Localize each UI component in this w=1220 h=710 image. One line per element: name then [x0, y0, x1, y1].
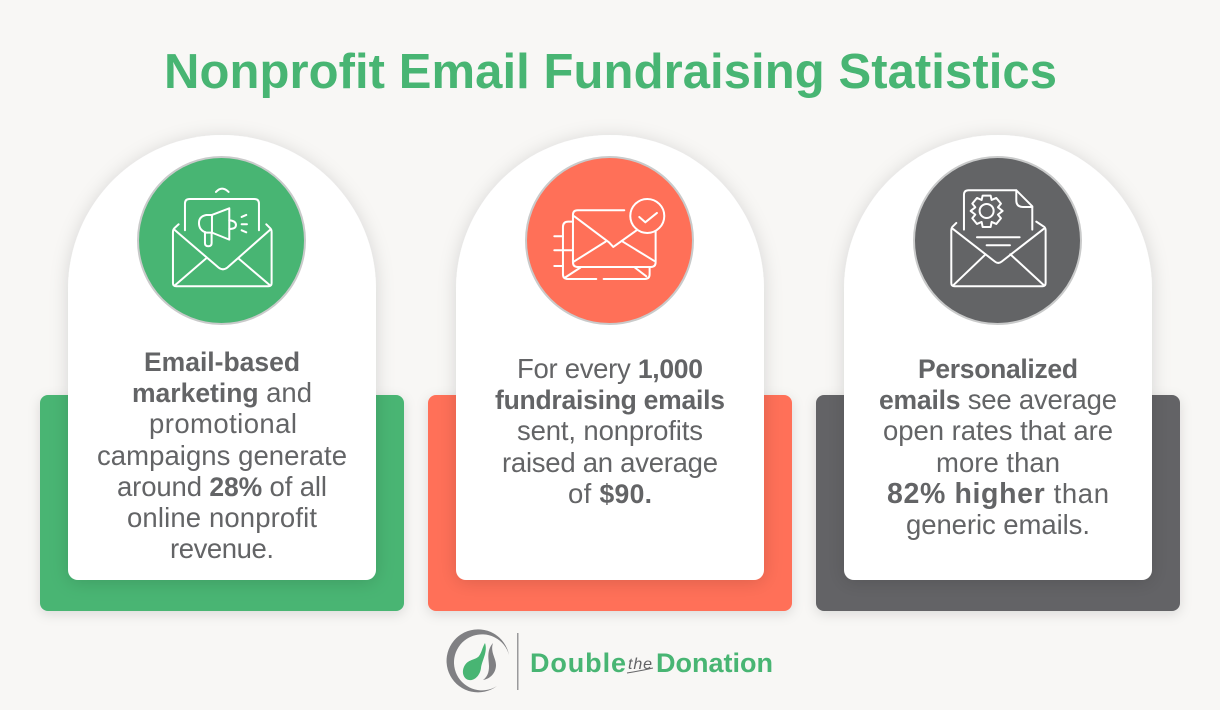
white arched card: [456, 135, 764, 580]
green base panel: [40, 395, 404, 611]
text: stat 1: Email-based: [144, 347, 300, 377]
text: stat 2: For every 1,000: [517, 353, 703, 384]
icon: envelope with gear document: [914, 157, 1081, 324]
text: stat 2: fundraising emails: [495, 385, 725, 415]
panel: funds per 1,000 emails: [428, 135, 792, 611]
text: stat 3: more than: [936, 447, 1060, 478]
title: Nonprofit Email Fundraising Statistics: [164, 45, 1057, 99]
text: stat 1: [97, 347, 347, 564]
logo wordmark: [530, 648, 773, 678]
text: stat 3: generic emails.: [906, 509, 1090, 540]
text: stat 3: [879, 354, 1117, 540]
text: stat 1: campaigns generate: [97, 440, 347, 471]
text: stat 3: 82% higher than: [887, 478, 1109, 510]
text: stat 2: [495, 353, 725, 509]
white arched card: [68, 135, 376, 580]
text: stat 1: revenue.: [170, 533, 274, 564]
text: stat 1: marketing and: [132, 377, 312, 408]
text: stat 3: Personalized: [918, 354, 1078, 384]
logo: Double the Donation: [447, 629, 773, 692]
text: stat 3: emails see average: [879, 384, 1117, 415]
text: stat 1: around 28% of all: [117, 471, 327, 502]
panel: email marketing revenue: [40, 135, 404, 611]
text: stat 3: open rates that are: [883, 415, 1113, 446]
logo mark: [447, 629, 518, 692]
text: stat 2: of $90.: [568, 478, 652, 509]
orange base panel: [428, 395, 792, 611]
logo wordmark: Donation: [656, 648, 773, 678]
logo wordmark: Double: [530, 648, 626, 678]
icon: envelope with megaphone: [138, 157, 305, 324]
gray base panel: [816, 395, 1180, 611]
text: stat 2: sent, nonprofits: [517, 415, 703, 446]
logo wordmark: the: [628, 656, 652, 673]
text: stat 1: promotional: [149, 408, 297, 439]
icon: envelopes with check mark: [526, 157, 693, 324]
text: stat 1: online nonprofit: [127, 502, 317, 533]
text: stat 2: raised an average: [502, 447, 718, 478]
white arched card: [844, 135, 1152, 580]
panel: personalized emails: [816, 135, 1180, 611]
